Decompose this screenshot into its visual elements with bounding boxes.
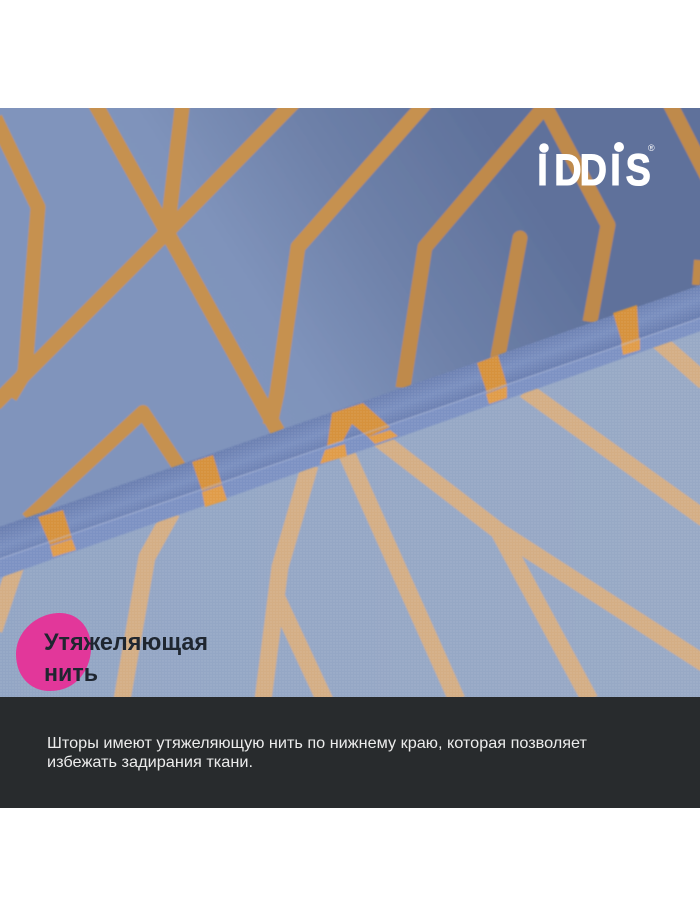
heading with pink accent <box>16 613 208 691</box>
logo: iDDiS: IDDIS <box>537 145 651 195</box>
hem: weighted thread fold <box>0 280 700 583</box>
dark description band <box>0 697 700 808</box>
hem flap <box>0 311 700 583</box>
orange bands on hem <box>38 305 640 557</box>
infographic canvas <box>0 108 700 808</box>
heading text: нить <box>44 660 98 687</box>
photo: curtain fabric <box>0 95 700 715</box>
heading text: Утяжеляющая <box>44 629 208 656</box>
logo dots <box>539 142 624 153</box>
gold geometric pattern on upper panel <box>0 100 700 519</box>
pink blob <box>16 613 91 691</box>
description text: Шторы имеют утяжеляющую нить по нижнему краю, которая позволяет <box>47 735 588 752</box>
upper curtain panel <box>0 108 700 528</box>
registered mark: ® <box>648 143 655 153</box>
hem roll <box>0 280 700 564</box>
description text: избежать задирания ткани. <box>47 754 253 771</box>
stitching line <box>0 313 700 564</box>
pale gold pattern on lower panel <box>0 338 700 705</box>
lower curtain panel <box>0 317 700 715</box>
